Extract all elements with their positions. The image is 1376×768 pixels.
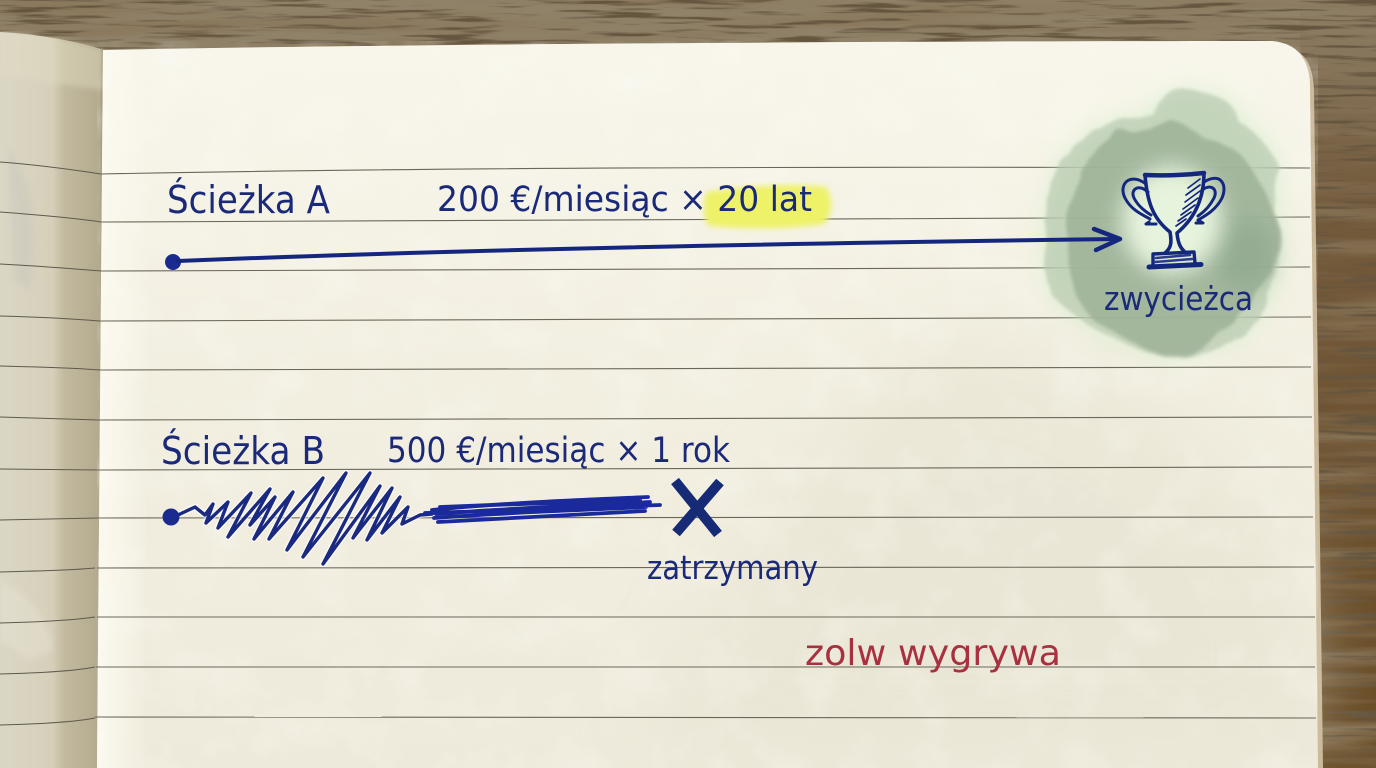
winner label: zwycieżca bbox=[1104, 279, 1253, 318]
path B formula: 500 €/miesiąc × 1 rok bbox=[387, 431, 731, 471]
highlight on 20 lat bbox=[704, 185, 831, 228]
watercolor stain with glow around the trophy bbox=[1044, 90, 1282, 357]
path B label: Ścieżka B bbox=[161, 429, 325, 473]
path A label: Ścieżka A bbox=[167, 178, 330, 222]
path B scribble line bbox=[162, 473, 660, 564]
left notebook page bbox=[0, 32, 104, 768]
red conclusion note: zolw wygrywa bbox=[805, 633, 1061, 674]
stopped label: zatrzymany bbox=[647, 548, 818, 587]
path A straight arrow bbox=[165, 229, 1120, 270]
icon: stop X mark bbox=[675, 481, 720, 534]
page edge on the right bbox=[1295, 50, 1323, 768]
path A formula: 200 €/miesiąc × 20 lat bbox=[437, 180, 812, 220]
icon: trophy bbox=[1123, 173, 1224, 267]
